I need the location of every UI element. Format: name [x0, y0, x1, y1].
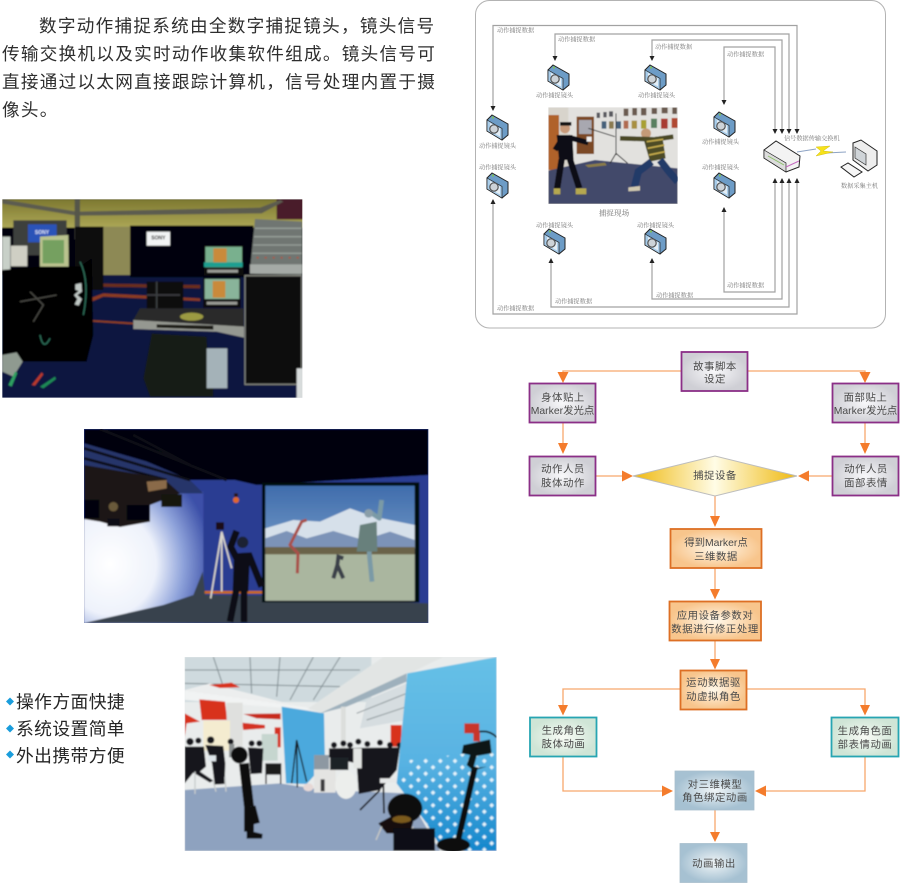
table — [132, 307, 244, 326]
camera labels: 动作捕捉镜头 — [536, 222, 574, 230]
box: face markers: 面部贴上 — [844, 391, 887, 404]
performer — [230, 531, 262, 622]
box: facial expression — [832, 456, 898, 496]
bullet list: 系统设置简单 — [16, 719, 125, 739]
sign — [147, 232, 170, 246]
camera labels: 动作捕捉镜头 — [637, 222, 675, 230]
tripod — [292, 740, 307, 787]
box: bind animation — [675, 771, 754, 810]
camera labels: 动作捕捉镜头 — [479, 164, 517, 172]
diamond: capture device: 捕捉设备 — [693, 469, 737, 482]
camera labels — [479, 92, 740, 230]
left fencer — [560, 123, 570, 133]
camera labels: 动作捕捉镜头 — [479, 142, 517, 150]
box: body animation: 生成角色 — [542, 724, 585, 737]
red panels — [199, 699, 227, 720]
intro paragraph — [2, 16, 436, 120]
studio lights — [84, 500, 99, 518]
box: facial expression: 动作人员 — [844, 464, 888, 476]
connector: camera data lines top — [490, 26, 800, 134]
label: computer: 数据采集主机 — [841, 182, 878, 190]
photo: motion capture studio with projection screen — [84, 429, 428, 623]
box: drive virtual character: 运动数据驱 — [686, 676, 741, 689]
box: body markers: Marker发光点 — [531, 404, 594, 417]
box: face markers: Marker发光点 — [834, 404, 897, 417]
beams — [185, 682, 280, 702]
camera labels: 动作捕捉镜头 — [536, 92, 574, 100]
box: marker 3D data — [670, 529, 762, 568]
box: face markers — [832, 384, 898, 422]
box: facial expression: 面部表情 — [844, 476, 888, 490]
performer — [231, 747, 248, 763]
box: bind animation: 对三维模型 — [688, 778, 742, 791]
chair — [143, 333, 213, 397]
data line labels — [497, 26, 764, 312]
data line labels: 动作捕捉数据 — [558, 36, 595, 44]
icon: computer — [841, 140, 877, 177]
floor — [185, 783, 440, 851]
flight case — [245, 276, 302, 384]
data line labels: 动作捕捉数据 — [497, 304, 534, 312]
intro paragraph: 数字动作捕捉系统由全数字捕捉镜头，镜头信号 — [39, 16, 435, 36]
box: parameter correction — [670, 602, 761, 640]
blue wall — [397, 657, 497, 851]
box: drive virtual character — [680, 670, 746, 710]
box: facial animation: 生成角色面 — [838, 724, 892, 738]
box: body animation — [530, 718, 596, 756]
camera labels: 动作捕捉镜头 — [702, 138, 740, 146]
box: body motion: 动作人员 — [541, 464, 585, 476]
chair — [388, 794, 422, 823]
box: body motion: 肢体动作 — [541, 476, 585, 490]
white central column — [341, 707, 346, 750]
box: story script: 故事脚本 — [693, 360, 737, 373]
intro paragraph: 像头。 — [2, 100, 59, 120]
data line labels: 动作捕捉数据 — [555, 298, 592, 306]
panel: capture system diagram — [476, 0, 886, 328]
diamond: capture device — [633, 456, 797, 496]
connector: camera data lines bottom — [490, 178, 800, 314]
icons: cameras — [487, 65, 735, 254]
photo: Sony broadcast equipment: SONY — [151, 235, 166, 241]
data line labels: 动作捕捉数据 — [727, 282, 764, 290]
photo: Sony broadcast equipment: SONY — [35, 230, 50, 236]
box: animation output — [680, 844, 747, 882]
monitors — [204, 245, 243, 276]
camera on pole — [457, 767, 475, 847]
box: body markers: 身体贴上 — [541, 391, 585, 404]
caption: capture scene: 捕捉现场 — [599, 208, 630, 218]
box: drive virtual character: 动虚拟角色 — [686, 690, 741, 703]
photo: Sony broadcast equipment — [2, 199, 302, 398]
floor — [84, 572, 428, 623]
box: animation output: 动画输出 — [692, 857, 736, 870]
bullet list: 外出携带方便 — [16, 746, 125, 766]
desk — [314, 755, 329, 770]
left TV — [13, 220, 67, 255]
bullet list: 操作方面快捷 — [16, 692, 125, 712]
photo: capture scene — [548, 107, 678, 204]
box: body motion — [530, 456, 596, 496]
intro paragraph: 传输交换机以及实时动作收集软件组成。镜头信号可 — [2, 44, 436, 64]
box: story script: 设定 — [704, 372, 726, 386]
data line labels: 动作捕捉数据 — [656, 292, 693, 300]
avatars on screen — [290, 520, 307, 573]
flow arrowheads — [558, 372, 870, 842]
photo: exhibition hall demonstration — [184, 657, 497, 851]
box: parameter correction: 数据进行修正处理 — [671, 622, 759, 636]
data line labels: 动作捕捉数据 — [497, 26, 534, 34]
box: facial animation: 部表情动画 — [838, 738, 892, 751]
box: marker 3D data: 三维数据 — [694, 550, 738, 563]
box: story script — [682, 352, 748, 391]
box: body markers — [530, 384, 596, 422]
right fencer — [641, 128, 651, 138]
glass roof — [185, 657, 371, 702]
camera labels: 动作捕捉镜头 — [638, 92, 676, 100]
tripod — [211, 532, 232, 598]
flowchart — [530, 352, 898, 882]
icon: lightning link — [797, 146, 846, 156]
mixer — [250, 219, 302, 275]
box: parameter correction: 应用设备参数对 — [677, 609, 753, 622]
camera rig — [2, 258, 93, 362]
box: marker 3D data: 得到Marker点 — [684, 537, 748, 549]
blue pillar — [282, 707, 325, 784]
crowd right — [329, 739, 402, 794]
icon: signal switch — [764, 141, 800, 172]
crowd left — [185, 736, 263, 785]
camera labels: 动作捕捉镜头 — [702, 164, 740, 172]
screen — [262, 482, 419, 602]
box: facial animation — [832, 718, 898, 756]
data line labels: 动作捕捉数据 — [727, 50, 764, 58]
data line labels: 动作捕捉数据 — [655, 43, 692, 51]
flow connectors — [563, 371, 865, 832]
bullet list — [6, 692, 125, 766]
box: body animation: 肢体动画 — [542, 738, 585, 750]
intro paragraph: 直接通过以太网直接跟踪计算机，信号处理内置于摄 — [2, 72, 436, 92]
box: bind animation: 角色绑定动画 — [682, 791, 748, 804]
label: switch: 信号数据传输交换机 — [784, 134, 840, 142]
